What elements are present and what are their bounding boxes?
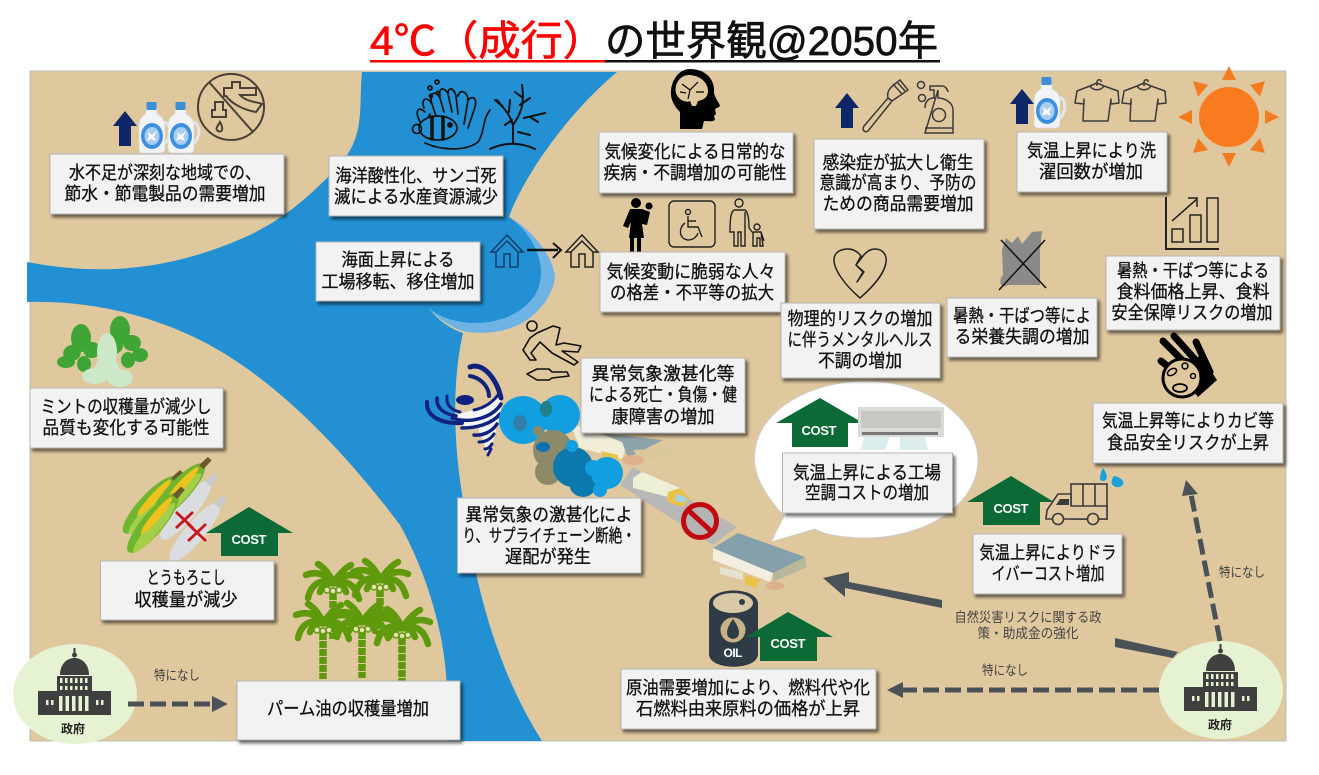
icon: corn crossed — [116, 451, 232, 568]
label: natural disaster policy: 自然災害リスクに関する政 — [954, 609, 1102, 625]
callout: malnutrition — [947, 298, 1097, 357]
callout: daily illness: 気候変化による日常的な — [604, 142, 786, 162]
label: none: 特になし — [1219, 565, 1265, 580]
callout: extreme weather deaths: 康障害の増加 — [612, 407, 714, 427]
callout: water shortage — [50, 154, 284, 214]
title: の世界観@2050年 — [605, 18, 938, 64]
callout: mental health: 不調の増加 — [818, 351, 902, 371]
callout: mold — [1093, 403, 1283, 463]
truck — [633, 472, 690, 507]
callout: hygiene: 意識が高まり、予防の — [820, 173, 976, 193]
cost arrow: air conditioning: COST — [802, 423, 837, 438]
label: natural disaster policy: 策・助成金の強化 — [978, 625, 1079, 641]
callout: extreme weather deaths — [581, 358, 745, 433]
callout: extreme weather deaths: による死亡・負傷・健 — [589, 385, 737, 405]
icon: no water — [198, 74, 264, 140]
government right — [1159, 641, 1283, 739]
government left — [13, 644, 137, 744]
callout: palm oil — [237, 681, 460, 740]
icon: coral and fish — [412, 80, 545, 149]
callout: mental health: 物理的リスクの増加 — [788, 309, 932, 329]
callout: mint — [30, 388, 223, 448]
callout: food prices: 暑熱・干ばつ等による — [1117, 261, 1269, 281]
icon: parent carrying child — [623, 198, 652, 252]
callout: ocean acidification — [329, 156, 503, 216]
icon: wheelchair — [669, 201, 715, 247]
icon: rising bar chart — [1166, 197, 1219, 249]
callout: laundry: 濯回数が増加 — [1039, 162, 1143, 182]
icon: oil drum: OIL — [724, 646, 742, 660]
callout: food prices — [1106, 256, 1280, 330]
callout: palm oil: パーム油の収穫量増加 — [267, 699, 429, 719]
callout: driver cost: イバーコスト増加 — [992, 564, 1104, 584]
callout: mint: 品質も変化する可能性 — [42, 418, 210, 438]
callout: laundry: 気温上昇により洗 — [1027, 141, 1156, 161]
callout: mint: ミントの収穫量が減少し — [40, 397, 212, 417]
callout: mold: 気温上昇等によりカビ等 — [1102, 411, 1274, 431]
callout: factory cooling: 空調コストの増加 — [805, 483, 929, 503]
icon: up arrow, toothbrush, soap — [835, 80, 953, 133]
title: （成行） — [436, 18, 605, 64]
callout: food prices: 食料価格上昇、食料 — [1116, 282, 1270, 302]
callout: ocean acidification: 滅による水産資源減少 — [334, 187, 498, 207]
arrow: government to oil — [887, 682, 1159, 698]
callout: crude oil: 原油需要増加により、燃料代や化 — [626, 678, 870, 698]
icon: tornado — [427, 366, 501, 455]
cost arrow: oil — [746, 612, 833, 661]
icon: brain head — [671, 69, 720, 129]
speech bubble — [754, 381, 978, 542]
icon: oil drum — [709, 590, 758, 667]
icon: truck with sweat — [1046, 468, 1123, 524]
no entry sign — [684, 504, 716, 538]
arrow: government to palm oil — [128, 696, 228, 712]
title: 4℃ — [370, 18, 436, 64]
callout: crude oil — [621, 669, 876, 729]
callout: corn — [100, 561, 274, 620]
callout: supply chain: 異常気象の激甚化によ — [466, 505, 632, 525]
arrow: government to factory — [823, 572, 1178, 658]
callout: hygiene — [814, 139, 984, 229]
callout: inequality: 気候変動に脆弱な人々 — [606, 262, 776, 282]
callout: driver cost: 気温上昇によりドラ — [980, 543, 1116, 563]
callout: hygiene: 感染症が拡大し衛生 — [822, 153, 974, 173]
callout: ocean acidification: 海洋酸性化、サンゴ死 — [336, 166, 496, 186]
icon: crossed out groceries — [999, 231, 1046, 290]
callout: sea level rise — [316, 242, 480, 301]
callout: mental health: に伴うメンタルヘルス — [788, 330, 932, 350]
callout: extreme weather deaths: 異常気象激甚化等 — [592, 364, 734, 384]
callout: sea level rise: 海面上昇による — [342, 250, 454, 270]
callout: corn: 収穫量が減少 — [134, 590, 238, 610]
icon: air conditioner — [858, 407, 944, 450]
callout: supply chain: り、サプライチェーン断絶・ — [462, 526, 636, 546]
cost arrow: air conditioning — [776, 398, 863, 447]
cost arrow: driver — [967, 476, 1054, 525]
label: none: 特になし — [154, 668, 200, 683]
callout: malnutrition: 暑熱・干ばつ等によ — [953, 306, 1091, 326]
icon: sun — [1178, 66, 1279, 167]
callout: water shortage: 節水・節電製品の需要増加 — [64, 184, 266, 204]
government right: 政府 — [1208, 717, 1232, 732]
icon: broken heart — [834, 249, 886, 298]
callout: supply chain — [458, 498, 641, 573]
flood blobs — [499, 395, 623, 497]
road with trucks and factory — [499, 395, 807, 590]
icon: adult with child — [730, 199, 764, 246]
callout: daily illness — [599, 132, 793, 193]
callout: inequality — [600, 252, 785, 312]
title — [370, 18, 940, 64]
cost arrow: corn: COST — [232, 532, 267, 547]
callout: food prices: 安全保障リスクの増加 — [1112, 303, 1272, 323]
government left: 政府 — [61, 721, 85, 736]
arrow: government to mold risk — [1182, 480, 1220, 641]
icon: palm trees — [296, 561, 430, 684]
callout: crude oil: 石燃料由来原料の価格が上昇 — [636, 699, 860, 719]
callout: mold: 食品安全リスクが上昇 — [1107, 433, 1269, 453]
icon: up arrow, detergent, shirts — [1010, 77, 1166, 128]
callout: water shortage: 水不足が深刻な地域での、 — [69, 163, 261, 183]
callout: driver cost — [973, 534, 1122, 594]
factory — [713, 533, 807, 590]
icon: house moved inland — [491, 235, 598, 267]
callout: inequality: の格差・不平等の拡大 — [610, 283, 774, 303]
callout: hygiene: ための商品需要増加 — [822, 194, 974, 214]
icon: up arrow, detergent bottles — [113, 102, 199, 153]
callout: supply chain: 遅配が発生 — [505, 547, 591, 567]
cost arrow: corn — [206, 507, 293, 556]
callout: laundry — [1017, 132, 1167, 192]
icon: person slipping — [523, 321, 581, 380]
label: natural disaster policy — [954, 609, 1102, 641]
callout: factory cooling — [782, 453, 952, 513]
factory under water — [570, 423, 673, 465]
callout: factory cooling: 気温上昇による工場 — [793, 463, 941, 483]
label: none: 特になし — [982, 663, 1028, 678]
cost arrow: oil: COST — [770, 636, 806, 651]
icon: mint leaves — [57, 316, 148, 387]
callout: sea level rise: 工場移転、移住増加 — [322, 272, 474, 292]
callout: daily illness: 疾病・不調増加の可能性 — [604, 163, 786, 183]
callout: mental health — [781, 303, 940, 378]
sea and river — [27, 72, 617, 741]
callout: corn: とうもろこし — [146, 568, 226, 588]
callout: malnutrition: る栄養失調の増加 — [954, 327, 1090, 347]
icon: hand with germs — [1161, 336, 1217, 397]
cost arrow: driver: COST — [994, 501, 1029, 516]
